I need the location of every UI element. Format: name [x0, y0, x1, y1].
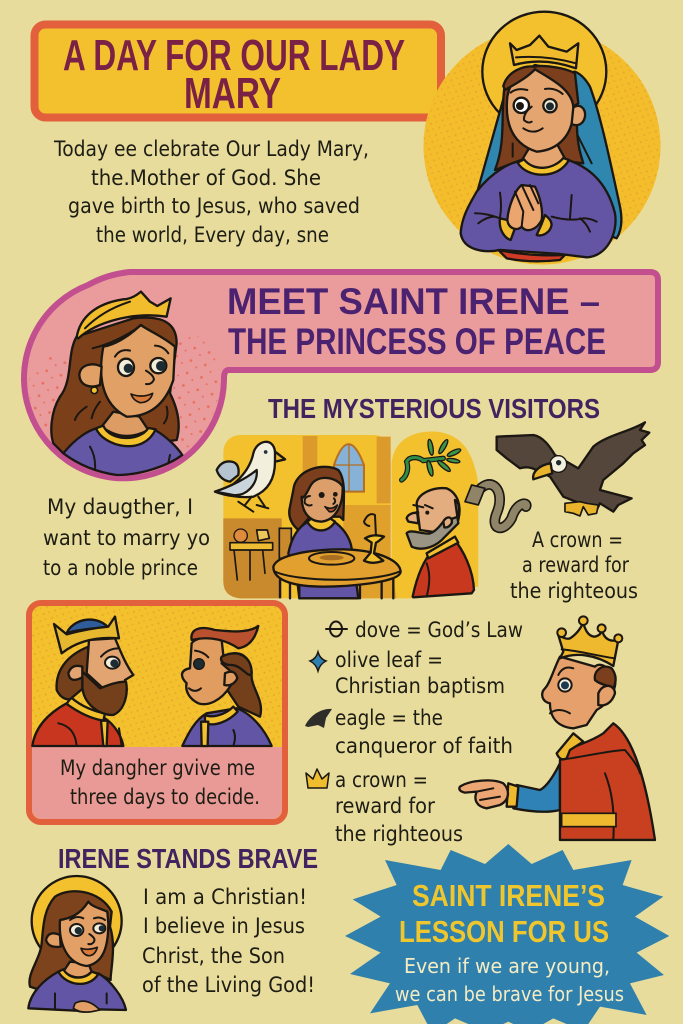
callout starburst: Saint Irene's lesson for us: Even if we are young, — [404, 954, 610, 978]
intro text about Our Lady Mary — [53, 137, 369, 247]
caption: a crown is a reward for the righteous: A crown = — [532, 528, 623, 552]
intro text about Our Lady Mary: the.Mother of God. She — [91, 166, 321, 190]
caption: a crown is a reward for the righteous — [510, 528, 638, 603]
caption: a crown is a reward for the righteous: a reward for — [522, 553, 629, 577]
legend text: crown: reward for — [335, 794, 435, 818]
text: Irene's declaration of faith: Christ, the Son — [142, 944, 285, 968]
speech text: father's marriage wish: My daugther, I — [47, 495, 193, 519]
callout starburst: Saint Irene's lesson for us — [345, 844, 669, 1024]
legend text: dove: dove = God’s Law — [355, 618, 523, 642]
legend text: olive leaf: Christian baptism — [335, 674, 505, 698]
callout starburst: Saint Irene's lesson for us: SAINT IRENE’S — [412, 878, 605, 913]
figure: Irene in profile — [182, 626, 272, 746]
illustration: Our Lady Mary praying with crown and halo — [424, 12, 660, 265]
icon: small crown — [306, 769, 329, 788]
legend text: crown: the righteous — [335, 822, 463, 846]
title banner: A Day for Our Lady Mary — [34, 24, 441, 118]
symbol legend: dove, olive leaf, eagle, crown — [305, 618, 523, 846]
heading: Irene Stands Brave: IRENE STANDS BRAVE — [58, 843, 318, 874]
illustration: king pointing — [459, 616, 655, 840]
intro text about Our Lady Mary: gave birth to Jesus, who saved — [68, 194, 360, 218]
heading: The Mysterious Visitors: THE MYSTERIOUS VISITORS — [268, 393, 600, 424]
text: Irene's declaration of faith: I believe in Jesus — [143, 914, 305, 938]
callout starburst: Saint Irene's lesson for us: LESSON FOR US — [399, 914, 609, 949]
title banner: A Day for Our Lady Mary: A DAY FOR OUR LADY — [63, 31, 405, 80]
legend text: olive leaf — [335, 648, 505, 698]
speech text: father's marriage wish — [43, 495, 210, 580]
legend text: olive leaf: olive leaf = — [335, 648, 443, 672]
figure: bearded king — [32, 617, 133, 746]
legend text: eagle: eagle = the — [335, 706, 443, 730]
caption: three days to decide: My dangher gvive me — [60, 756, 255, 780]
section banner: Meet Saint Irene, the Princess of Peace — [24, 272, 658, 478]
legend text: crown: a crown = — [335, 768, 428, 792]
panel: father and Irene conversation — [29, 603, 285, 822]
icon: blue diamond — [310, 652, 326, 671]
illustration: Irene and old man at a table, with dove, olive leaf, snake and eagle — [215, 422, 649, 598]
caption: a crown is a reward for the righteous: the righteous — [510, 579, 638, 603]
legend text: crown — [335, 768, 463, 846]
caption: three days to decide — [60, 756, 260, 809]
intro text about Our Lady Mary: the world, Every day, sne — [96, 223, 329, 247]
icon: dark eagle — [305, 709, 332, 728]
callout starburst: Saint Irene's lesson for us: we can be brave for Jesus — [395, 982, 624, 1006]
section banner: Meet Saint Irene, the Princess of Peace: MEET SAINT IRENE – — [227, 281, 600, 322]
icon: dove symbol — [326, 622, 347, 636]
legend text: eagle — [335, 706, 513, 758]
text: Irene's declaration of faith: I am a Christian! — [143, 885, 307, 909]
legend text: eagle: canqueror of faith — [335, 734, 513, 758]
illustration: Irene with halo — [28, 876, 126, 1012]
title banner: A Day for Our Lady Mary: MARY — [184, 69, 281, 118]
speech text: father's marriage wish: to a noble prince — [43, 556, 198, 580]
text: Irene's declaration of faith — [142, 885, 315, 997]
speech text: father's marriage wish: want to marry yo — [43, 526, 210, 550]
caption: three days to decide: three days to decide. — [70, 785, 260, 809]
text: Irene's declaration of faith: of the Living God! — [142, 973, 315, 997]
illustration: Princess Irene portrait with crown — [51, 292, 182, 475]
intro text about Our Lady Mary: Today ee clebrate Our Lady Mary, — [53, 137, 369, 161]
